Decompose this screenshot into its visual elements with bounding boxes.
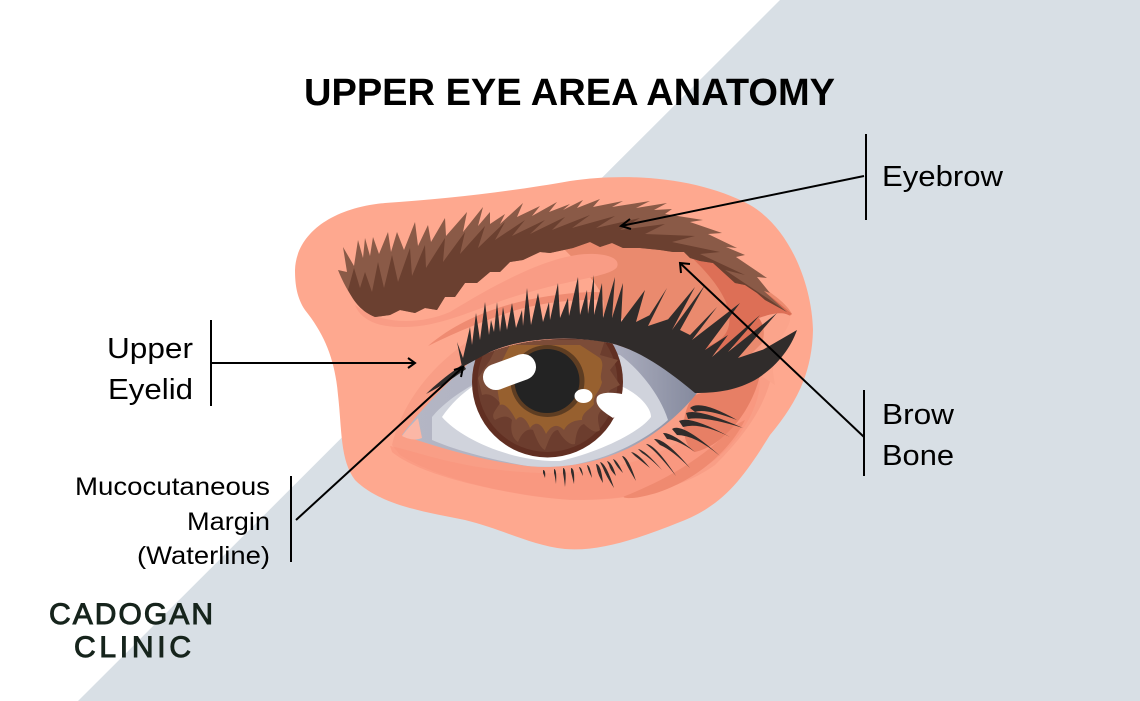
inner eye corner (402, 418, 422, 439)
logo: CADOGAN (49, 598, 213, 631)
upper eyelashes (426, 275, 797, 394)
logo: CLINIC (74, 631, 191, 664)
upper lid crease (428, 292, 660, 346)
callout: brow bone: Bone (882, 440, 954, 472)
callout: upper eyelid (107, 320, 415, 406)
title: UPPER EYE AREA ANATOMY (304, 72, 835, 114)
skin patch (295, 177, 813, 549)
lower eyelashes (543, 405, 743, 488)
lower lid shading (392, 320, 775, 500)
callout: brow bone (680, 263, 955, 476)
iris (472, 339, 623, 458)
brow bone dark shadow (690, 256, 792, 351)
callout: upper eyelid: Upper (107, 333, 193, 365)
callout: mucocutaneous margin: Margin (187, 508, 270, 536)
illustration: eye (295, 177, 813, 549)
callout: mucocutaneous margin: (Waterline) (137, 542, 270, 570)
callout: eyebrow (621, 134, 1004, 229)
callout: eyebrow: Eyebrow (882, 161, 1004, 193)
callout: upper eyelid: Eyelid (108, 374, 193, 406)
callout: mucocutaneous margin (75, 367, 463, 570)
brow bone (560, 241, 792, 375)
callout: mucocutaneous margin: Mucocutaneous (75, 473, 270, 501)
highlights (496, 367, 634, 418)
callout: brow bone: Brow (882, 399, 955, 431)
eye white and iris (402, 339, 697, 467)
highlight under brow (355, 254, 618, 327)
eyebrow (338, 199, 787, 317)
logo (49, 598, 213, 664)
